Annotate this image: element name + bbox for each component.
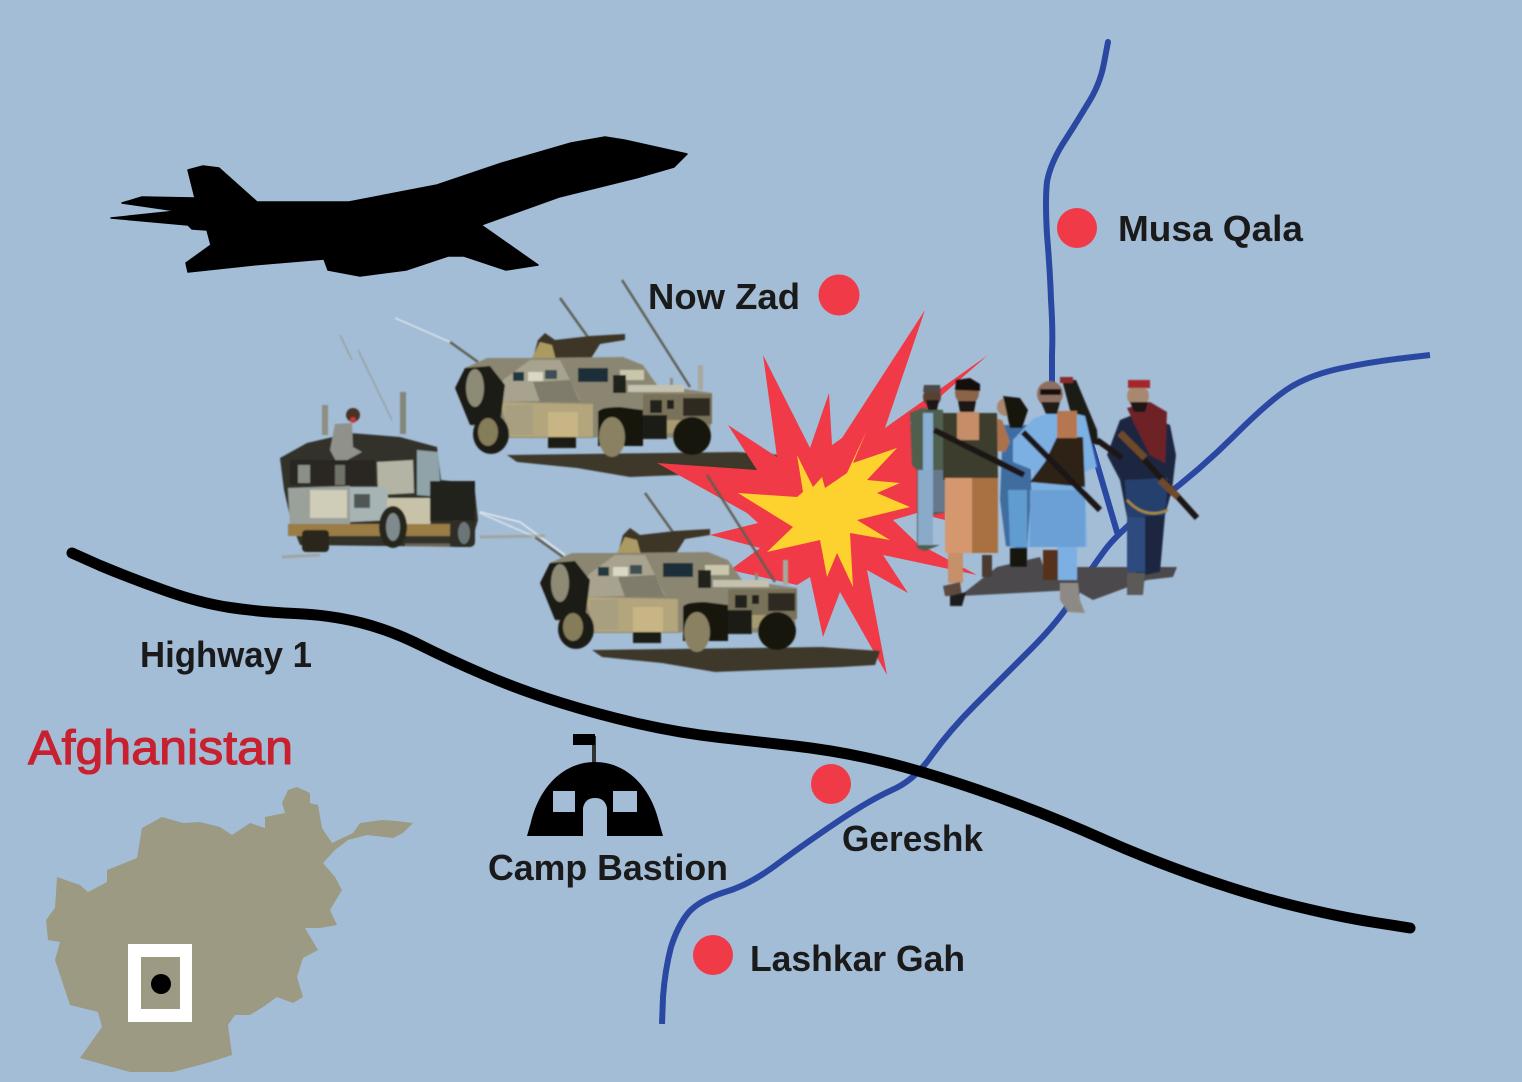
marker: Now Zad bbox=[818, 274, 860, 316]
country silhouette bbox=[46, 787, 413, 1072]
label: Highway 1: Highway 1 bbox=[140, 634, 312, 675]
marker: Musa Qala bbox=[1057, 208, 1097, 248]
locator map: Afghanistan bbox=[46, 787, 413, 1072]
river: Helmand main branch bbox=[662, 355, 1430, 1024]
marker: Lashkar Gah bbox=[693, 935, 733, 975]
fighter far left bbox=[910, 385, 947, 551]
vehicle: rear view with gunner bbox=[280, 335, 565, 557]
explosion red burst bbox=[657, 310, 988, 675]
jet bomber silhouette bbox=[111, 137, 687, 276]
label: Gereshk: Gereshk bbox=[842, 818, 984, 859]
label: Camp Bastion: Camp Bastion bbox=[488, 847, 728, 888]
fighter in orange bbox=[943, 378, 1010, 606]
Taliban fighters group bbox=[910, 377, 1197, 613]
locator dot bbox=[151, 974, 171, 994]
fighter behind, long hair and red cap bbox=[1060, 377, 1098, 445]
fighter centre back bbox=[997, 396, 1032, 567]
marker: Gereshk bbox=[811, 764, 851, 804]
road: Highway 1 bbox=[72, 553, 1410, 928]
rifles bbox=[934, 430, 1197, 518]
label: Lashkar Gah: Lashkar Gah bbox=[750, 938, 965, 979]
vehicle: Jackal, top bbox=[395, 280, 795, 477]
river: northern branch bbox=[1046, 42, 1117, 532]
ground shadow bbox=[960, 557, 1177, 600]
label: Now Zad: Now Zad bbox=[648, 276, 800, 317]
explosion yellow core bbox=[738, 430, 910, 587]
fighter with red cap bbox=[1107, 380, 1176, 595]
label: Musa Qala: Musa Qala bbox=[1118, 208, 1304, 249]
explosion bbox=[657, 310, 988, 675]
heading: Afghanistan: Afghanistan bbox=[28, 722, 293, 775]
icon: Camp Bastion tent bbox=[527, 734, 663, 836]
fighter in light blue bbox=[1013, 381, 1097, 613]
locator box bbox=[128, 944, 192, 1022]
vehicle: Jackal, lower bbox=[480, 475, 880, 672]
